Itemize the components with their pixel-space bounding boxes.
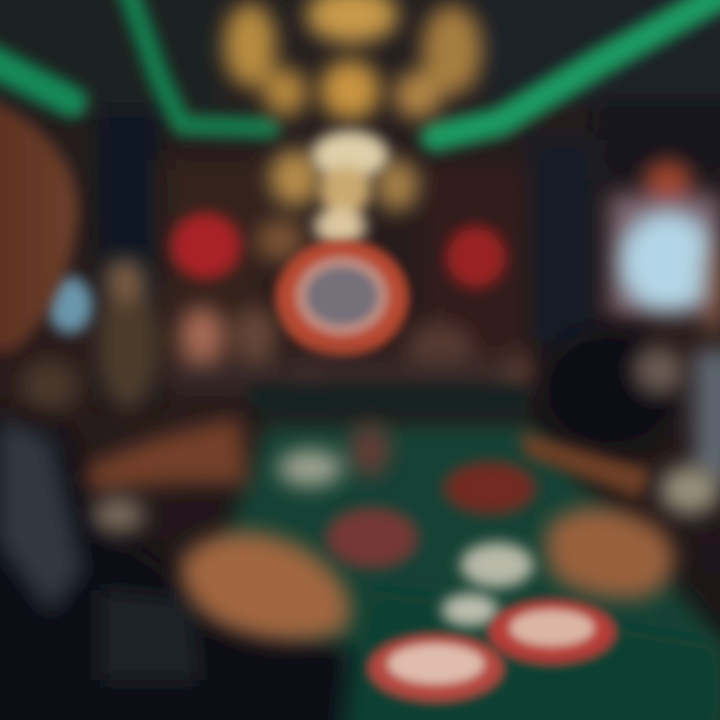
right foreground figure	[538, 328, 720, 480]
small chips on table	[92, 424, 720, 533]
green ceiling bands	[0, 0, 720, 137]
green poker table	[220, 425, 720, 720]
right screen	[610, 160, 720, 335]
chandelier bright centre	[312, 131, 388, 244]
table dark edge	[250, 385, 530, 413]
ceiling and side walls	[0, 0, 720, 400]
foreground hand right	[545, 508, 674, 598]
left screen	[48, 277, 92, 333]
foreground poker chip left	[368, 634, 504, 702]
left arm on table	[85, 418, 248, 492]
right arm on table	[520, 432, 650, 498]
left foreground arm	[0, 95, 78, 355]
stack of chips centre	[326, 462, 536, 626]
dark foreground player	[0, 410, 350, 720]
red wall circles	[171, 213, 506, 288]
central poker chip emblem	[276, 240, 408, 356]
gold chandelier	[224, 0, 482, 262]
foreground poker chip right	[488, 600, 616, 664]
foreground hand left	[180, 532, 350, 641]
crowd of spectators	[20, 258, 540, 411]
